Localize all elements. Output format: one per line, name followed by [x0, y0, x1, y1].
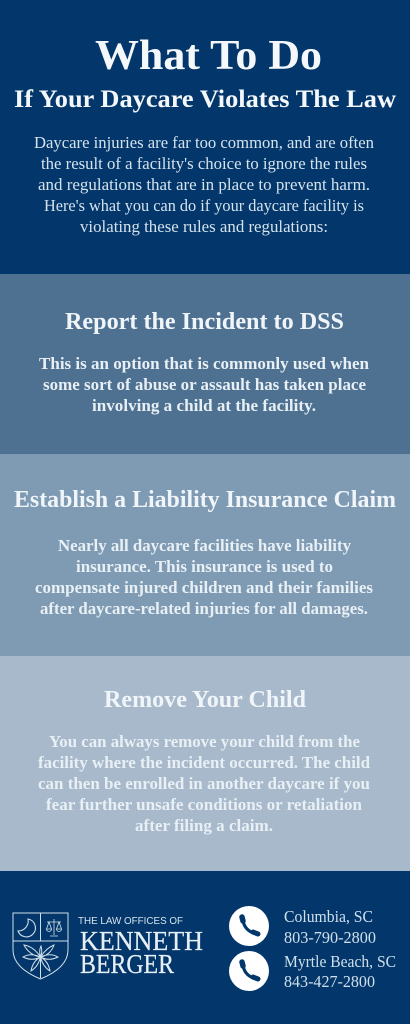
panel: footer: [0, 871, 410, 1024]
icon: phone Columbia: [229, 906, 269, 946]
subtitle: If Your Daycare Violates The Law: [14, 86, 396, 113]
contact: Columbia: Columbia, SC: [284, 907, 373, 926]
text: liability insurance claim: Nearly all daycare facilities have liability: [58, 536, 352, 555]
text: remove your child: You can always remove your child from the: [49, 732, 360, 751]
heading: report the incident: Report the Incident to DSS: [65, 308, 344, 335]
icon: law firm shield logo: [13, 913, 68, 979]
firm name: KENNETH: [80, 925, 203, 956]
firm name: [78, 915, 203, 979]
panel: header: [0, 0, 410, 274]
heading: liability insurance claim: Establish a Liability Insurance Claim: [14, 486, 396, 513]
icon: phone Myrtle Beach: [229, 951, 269, 991]
panel: liability insurance claim: [0, 454, 410, 656]
contact: Columbia: 803-790-2800: [284, 928, 376, 947]
text: report the incident: [39, 354, 369, 415]
contact: Myrtle Beach: Myrtle Beach, SC: [284, 952, 396, 971]
text: report the incident: some sort of abuse or assault has taken place: [43, 375, 366, 394]
text: liability insurance claim: insurance. This insurance is used to: [76, 557, 333, 576]
intro text: and regulations that are in place to prevent harm.: [38, 175, 370, 194]
text: liability insurance claim: [35, 536, 374, 618]
text: remove your child: [38, 732, 370, 835]
panel: remove your child: [0, 656, 410, 871]
heading: remove your child: Remove Your Child: [104, 686, 306, 713]
contact: Columbia: [284, 907, 376, 947]
intro text: Daycare injuries are far too common, and are often: [34, 133, 374, 152]
panel: report the incident: [0, 274, 410, 454]
intro text: Here's what you can do if your daycare facility is: [44, 196, 364, 215]
text: liability insurance claim: after daycare-related injuries for all damages.: [40, 599, 368, 618]
contact: Myrtle Beach: 843-427-2800: [284, 972, 375, 991]
text: remove your child: facility where the incident occurred. The child: [38, 753, 370, 772]
intro text: [34, 133, 374, 236]
text: liability insurance claim: compensate injured children and their families: [35, 578, 374, 597]
firm name: THE LAW OFFICES OF: [78, 915, 183, 927]
title: What To Do: [95, 33, 322, 79]
text: report the incident: involving a child at the facility.: [92, 396, 316, 415]
text: remove your child: can then be enrolled in another daycare if you: [38, 774, 370, 793]
contact: Myrtle Beach: [284, 952, 396, 991]
text: report the incident: This is an option that is commonly used when: [39, 354, 369, 373]
firm name: BERGER: [80, 948, 175, 979]
intro text: violating these rules and regulations:: [80, 217, 328, 236]
text: remove your child: after filing a claim.: [135, 816, 273, 835]
text: remove your child: fear further unsafe conditions or retaliation: [46, 795, 362, 814]
intro text: the result of a facility's choice to ignore the rules: [41, 154, 367, 173]
